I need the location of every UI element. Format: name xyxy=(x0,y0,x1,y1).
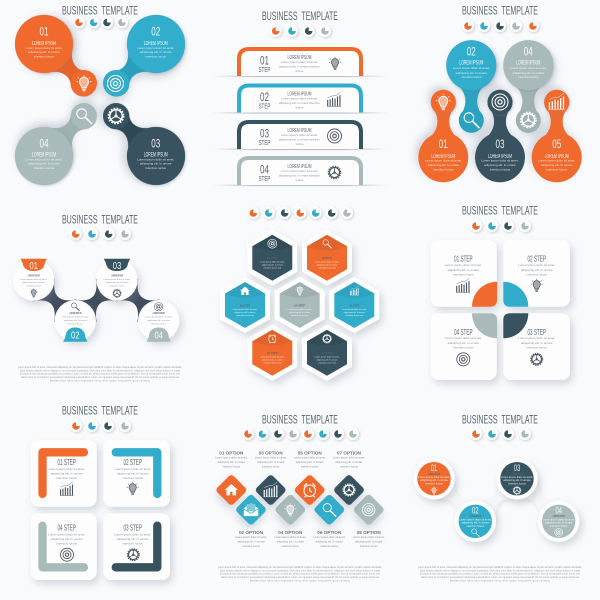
disc 03: 03 xyxy=(514,463,520,473)
hexagon orange search xyxy=(303,231,351,285)
hexagon orange clock: adipiscing elit. In ornare xyxy=(262,359,284,362)
legend dots xyxy=(470,428,531,440)
hexagon orange search: interdum luctus sed xyxy=(318,267,336,270)
footer paragraph: Quis ullamco laboris nisi ut aliquip ex ea commodo consequat. Duis aute irure dolor in reprehenderit in voluptate velit esse cillum dolore eu fugiat xyxy=(20,369,180,372)
droplet 01 orange: Lorem ipsum dolor sit amet, xyxy=(425,158,462,162)
hexagon blue home: adipiscing elit. In ornare xyxy=(234,311,256,314)
step 04 gray: Lorem ipsum dolor sit amet, xyxy=(25,158,63,162)
dark chain connectors xyxy=(32,278,160,322)
droplet 04 gray: interdum luctus xyxy=(518,75,539,79)
footer paragraph: Natus error sit voluptatem accusantium doloremque laudantium, totam rem aperiam eaque ipsa quae ab illo inventore veritatis et quasi architecto xyxy=(221,576,380,579)
diamond 01 orange home xyxy=(215,474,248,506)
step 01 tab: LOREM IPSUM xyxy=(288,55,312,61)
step 04 tab: LOREM IPSUM xyxy=(288,164,312,170)
card 02: Lorem ipsum dolor sit amet, xyxy=(518,263,555,267)
card 02: adipiscing elit. In ornare xyxy=(521,268,553,272)
footer paragraph: Quis ullamco laboris nisi ut aliquip ex ea commodo consequat. Duis aute irure dolor in reprehenderit in voluptate velit esse cillum dolore eu fugiat xyxy=(420,569,580,572)
card 04 xyxy=(31,513,97,580)
disc 02: adipiscing elit. In ornare xyxy=(462,521,490,525)
card 01: Lorem ipsum dolor sit amet, xyxy=(445,263,482,267)
card 03: 03 STEP xyxy=(527,328,546,337)
option 04: interdum luctus xyxy=(282,544,300,548)
step 01 tab xyxy=(212,49,388,77)
hexagon orange search: adipiscing elit. In ornare xyxy=(316,264,338,267)
circle 03 xyxy=(96,259,138,301)
card 02: 02 STEP xyxy=(527,255,546,264)
disc 04: interdum luctus xyxy=(550,524,568,528)
card 03: interdum luctus xyxy=(527,346,547,350)
hexagon dark target: 01 STEP xyxy=(267,256,278,260)
legend dots xyxy=(70,420,131,432)
card 04: Lorem ipsum dolor sit amet, xyxy=(48,533,85,537)
panel: coloured discs in white rings xyxy=(413,414,583,582)
option 03: Lorem ipsum dolor sit amet, xyxy=(255,456,287,460)
disc 02 xyxy=(455,501,496,542)
card 04: interdum luctus xyxy=(57,542,77,546)
step 02 tab: STEP xyxy=(258,104,271,110)
footer paragraph: Natus error sit voluptatem accusantium doloremque laudantium, totam rem aperiam eaque ipsa quae ab illo inventore veritatis et quasi architecto xyxy=(21,376,180,379)
card 02: adipiscing elit. In ornare xyxy=(117,472,149,476)
legend dots xyxy=(462,20,539,32)
step 01 tab: adipiscing elit. In ornare interdum xyxy=(279,64,320,68)
card 02: Lorem ipsum dolor sit amet, xyxy=(114,467,151,471)
droplet 02 blue xyxy=(446,40,496,133)
droplet 02 blue: Lorem ipsum dolor sit amet, xyxy=(453,66,490,70)
droplet 05 orange: 05 xyxy=(552,137,561,151)
option 07: adipiscing elit. In ornare xyxy=(335,460,363,464)
hexagon dark gear: adipiscing elit. In ornare xyxy=(316,359,338,362)
step 01 tab: 01 xyxy=(260,54,269,68)
footer paragraph: Lorem ipsum dolor sit amet, consectetur adipiscing elit. Sed eiusmod tempor incididunt ut labore et dolore magna aliqua. Ut enim ad minim veniam nostrud exercitation xyxy=(18,366,183,369)
step 03 tab: adipiscing elit. In ornare interdum xyxy=(279,138,320,142)
option 06 xyxy=(313,530,346,548)
diamond 06 blue search xyxy=(313,493,346,526)
droplet 01 orange: adipiscing elit. In ornare xyxy=(427,163,459,167)
circle 04: interdum luctus xyxy=(151,322,167,326)
card 03 xyxy=(503,313,570,380)
droplet 05 orange: interdum luctus xyxy=(547,168,567,172)
option 02: interdum luctus xyxy=(242,544,260,548)
card 04: adipiscing elit. In ornare xyxy=(447,341,479,345)
card 04: Lorem ipsum dolor sit amet, xyxy=(445,336,482,340)
option 01: 01 OPTION xyxy=(219,451,244,456)
circle 02: Lorem ipsum dolor sit amet, xyxy=(62,315,89,318)
step 01 orange: adipiscing elit. In ornare xyxy=(28,50,60,54)
circle 01: LOREM IPSUM xyxy=(28,274,40,278)
droplet 03 dark: adipiscing elit. In ornare xyxy=(484,163,516,167)
disc 01: Lorem ipsum dolor sit amet, xyxy=(418,475,450,479)
hexagon blue home xyxy=(221,278,269,332)
hexagon dark target xyxy=(248,231,296,285)
disc 01 xyxy=(413,458,455,499)
circle 03: 03 xyxy=(113,261,122,272)
hexagon orange clock: interdum luctus sed xyxy=(264,362,281,365)
droplet 03 dark xyxy=(475,90,525,182)
hexagon orange clock: Lorem ipsum dolor sit amet, xyxy=(260,356,285,359)
droplet 04 gray: Lorem ipsum dolor sit amet, xyxy=(510,66,547,70)
disc 04: Lorem ipsum dolor sit amet, xyxy=(543,518,575,522)
hexagon gray bulb: Lorem ipsum dolor sit amet, xyxy=(287,308,312,311)
disc 01: LOREM IPSUM xyxy=(428,472,440,476)
disc 01: adipiscing elit. In ornare xyxy=(420,478,448,482)
option 07 xyxy=(333,451,365,468)
hexagon dark gear: 07 STEP xyxy=(322,351,332,355)
step 03 tab: LOREM IPSUM xyxy=(288,128,312,134)
hexagon dark target: interdum luctus sed xyxy=(264,267,281,270)
droplet 04 gray: 04 xyxy=(524,45,533,59)
circle 01: interdum luctus xyxy=(26,284,42,287)
circle 03: Lorem ipsum dolor sit amet, xyxy=(104,278,131,281)
droplet 03 dark: LOREM IPSUM xyxy=(488,154,512,160)
diamond 05 orange clock xyxy=(293,474,326,506)
title: BUSINESS TEMPLATE xyxy=(462,6,538,18)
card 03: adipiscing elit. In ornare xyxy=(521,341,553,345)
legend dots xyxy=(70,228,131,240)
card 02: interdum luctus xyxy=(123,476,143,480)
hexagon blue bars: interdum luctus sed xyxy=(346,314,363,317)
step 01 orange: interdum luctus xyxy=(34,54,55,58)
droplet 01 orange xyxy=(418,90,468,182)
step 02 blue: interdum luctus xyxy=(146,54,166,58)
card 02 xyxy=(103,440,170,507)
step 04 tab: Lorem ipsum dolor sit amet, xyxy=(281,169,318,173)
disc 03 xyxy=(496,458,538,499)
option 05: interdum luctus xyxy=(301,464,319,468)
diamond 07 dark gear xyxy=(333,474,365,506)
hexagon dark gear: interdum luctus sed xyxy=(318,362,336,365)
step 04 gray: interdum luctus xyxy=(34,166,55,170)
option 06: adipiscing elit. In ornare xyxy=(316,539,344,543)
step 02 blue: 02 xyxy=(151,25,160,39)
card 02: interdum luctus xyxy=(527,272,547,276)
step 02 tab: 02 xyxy=(260,90,269,104)
option 06: interdum luctus xyxy=(321,544,339,548)
legend dots xyxy=(242,428,359,440)
title: BUSINESS TEMPLATE xyxy=(462,206,538,218)
diamond 04 gray bulb xyxy=(274,493,307,526)
panel: white circles on dark chain xyxy=(13,214,183,382)
option 05: 05 OPTION xyxy=(298,451,322,456)
legend dots xyxy=(247,207,353,219)
hexagon blue bars: Lorem ipsum dolor sit amet, xyxy=(342,308,367,311)
circle 01 xyxy=(13,259,54,301)
droplet 02 blue: adipiscing elit. In ornare xyxy=(455,71,487,75)
step 02 tab: LOREM IPSUM xyxy=(288,92,312,98)
legend dots xyxy=(73,16,128,28)
droplet 01 orange: 01 xyxy=(439,137,448,151)
circle 01: adipiscing elit. In ornare xyxy=(22,281,46,284)
card 01: adipiscing elit. In ornare xyxy=(51,472,83,476)
hexagon orange clock xyxy=(248,326,296,380)
droplet 04 gray: LOREM IPSUM xyxy=(516,60,540,66)
hexagon blue home: interdum luctus sed xyxy=(236,314,254,317)
card 01: 01 STEP xyxy=(57,458,76,467)
hexagon gray bulb: 04 STEP xyxy=(295,304,305,308)
disc 04: adipiscing elit. In ornare xyxy=(545,521,573,525)
step 04 gray: 04 xyxy=(40,137,49,151)
hexagon dark gear xyxy=(303,326,351,380)
step 02 tab: luctus xyxy=(296,106,304,110)
hexagon blue bars xyxy=(330,278,378,332)
card 04: adipiscing elit. In ornare xyxy=(51,537,83,541)
card 04: 04 STEP xyxy=(57,524,76,533)
panel: five vertical droplets xyxy=(418,6,582,182)
step 04 tab: 04 xyxy=(260,162,269,176)
option 02 xyxy=(235,530,267,548)
step 01 orange: LOREM IPSUM xyxy=(32,41,56,47)
step 01 tab: STEP xyxy=(258,67,271,74)
footer paragraph: Lorem ipsum dolor sit amet, consectetur adipiscing elit. Sed eiusmod tempor incididunt ut labore et dolore magna aliqua. Ut enim ad minim veniam nostrud exercitation xyxy=(218,566,383,569)
footer paragraph: Quis ullamco laboris nisi ut aliquip ex ea commodo consequat. Duis aute irure dolor in reprehenderit in voluptate velit esse cillum dolore eu fugiat xyxy=(220,569,380,572)
step 03 dark: LOREM IPSUM xyxy=(144,153,168,159)
option 08 xyxy=(353,530,385,548)
step 03 tab: STEP xyxy=(258,140,271,147)
option 04 xyxy=(274,530,307,548)
card 01: Lorem ipsum dolor sit amet, xyxy=(48,467,85,471)
footer paragraph: Lorem ipsum dolor sit amet, consectetur adipiscing elit. Sed eiusmod tempor incididunt ut labore et dolore magna aliqua. Ut enim ad minim veniam nostrud exercitation xyxy=(418,566,583,569)
option 08: adipiscing elit. In ornare xyxy=(355,539,383,543)
option 01: Lorem ipsum dolor sit amet, xyxy=(215,456,248,460)
panel: four cards with quarter discs xyxy=(431,206,570,380)
circle 04 xyxy=(138,300,179,342)
circle 04: Lorem ipsum dolor sit amet, xyxy=(145,315,173,318)
title: BUSINESS TEMPLATE xyxy=(62,6,138,18)
card 02: 02 STEP xyxy=(123,458,142,467)
circle 04: LOREM IPSUM xyxy=(153,311,165,315)
hexagon blue home: 03 STEP xyxy=(240,304,250,308)
option 04: 04 OPTION xyxy=(278,530,303,535)
circle 02: 02 xyxy=(71,331,80,342)
disc 04: 04 xyxy=(555,506,562,516)
disc 04 xyxy=(538,501,579,542)
footer paragraph: Excepteur sint occaecat cupidatat non proident, sunt in culpa qui officia deserunt mollit anim id est laborum. Sed ut perspiciatis unde omnis iste xyxy=(220,573,381,576)
option 07: Lorem ipsum dolor sit amet, xyxy=(333,456,365,460)
option 08: Lorem ipsum dolor sit amet, xyxy=(353,535,385,539)
step 03 tab: luctus xyxy=(296,142,304,146)
card 01: adipiscing elit. In ornare xyxy=(447,268,479,272)
step 03 tab xyxy=(212,122,388,150)
step 01 orange xyxy=(3,3,113,113)
card 01 xyxy=(431,240,497,307)
droplet 01 orange: LOREM IPSUM xyxy=(431,154,455,160)
droplet 01 orange: interdum luctus xyxy=(433,168,454,172)
disc 02: Lorem ipsum dolor sit amet, xyxy=(459,518,492,522)
footer paragraph: Excepteur sint occaecat cupidatat non proident, sunt in culpa qui officia deserunt mollit anim id est laborum. Sed ut perspiciatis unde omnis iste xyxy=(420,573,581,576)
card 02 xyxy=(503,240,570,307)
circle 02: LOREM IPSUM xyxy=(69,311,81,315)
card 04 xyxy=(431,313,497,380)
circle 02: adipiscing elit. In ornare xyxy=(64,319,88,322)
step 02 tab: Lorem ipsum dolor sit amet, xyxy=(281,96,318,100)
diamond 08 gray target xyxy=(352,493,385,526)
step 04 gray xyxy=(3,87,113,197)
step 01 tab: Lorem ipsum dolor sit amet, xyxy=(281,60,318,64)
legend dots xyxy=(270,25,331,37)
droplet 02 blue: 02 xyxy=(467,45,476,59)
option 07: interdum luctus xyxy=(340,464,358,468)
circle 03: LOREM IPSUM xyxy=(111,274,123,278)
title: BUSINESS TEMPLATE xyxy=(262,414,338,426)
circle 03: adipiscing elit. In ornare xyxy=(105,281,129,284)
footer paragraph: Excepteur sint occaecat cupidatat non proident, sunt in culpa qui officia deserunt mollit anim id est laborum. Sed ut perspiciatis unde omnis iste xyxy=(20,373,181,376)
droplet 05 orange: Lorem ipsum dolor sit amet, xyxy=(538,158,575,162)
option 04: Lorem ipsum dolor sit amet, xyxy=(274,535,307,539)
hexagon gray bulb: interdum luctus sed xyxy=(291,314,308,317)
circle 02 xyxy=(55,300,96,342)
step 04 tab: STEP xyxy=(258,176,271,183)
option 03: 03 OPTION xyxy=(259,451,283,456)
step 01 orange: Lorem ipsum dolor sit amet, xyxy=(25,46,63,50)
panel: eight option diamonds xyxy=(215,414,385,582)
option 03 xyxy=(255,451,287,468)
circle 01: 01 xyxy=(29,261,38,272)
step 03 dark: adipiscing elit. In ornare xyxy=(140,162,172,166)
droplet 02 blue: LOREM IPSUM xyxy=(459,60,483,66)
droplet 04 gray: adipiscing elit. In ornare xyxy=(512,71,544,75)
title: BUSINESS TEMPLATE xyxy=(262,11,338,23)
option 06: 06 OPTION xyxy=(317,530,342,535)
footer paragraph: Beatae vitae dicta sunt explicabo nemo enim ipsam voluptatem quia voluptas xyxy=(450,580,551,582)
legend dots xyxy=(470,220,531,232)
title: BUSINESS TEMPLATE xyxy=(62,214,138,226)
hexagon gray bulb xyxy=(276,278,324,332)
card 03 xyxy=(103,513,170,580)
circle 01: Lorem ipsum dolor sit amet, xyxy=(20,278,48,281)
step 04 tab xyxy=(212,158,388,186)
disc 03: LOREM IPSUM xyxy=(511,472,523,476)
circle 04: adipiscing elit. In ornare xyxy=(147,319,171,322)
panel: stacked step tabs xyxy=(212,11,388,186)
card 04: interdum luctus xyxy=(453,346,474,350)
droplet 03 dark: interdum luctus xyxy=(490,168,511,172)
disc 02: interdum luctus xyxy=(467,524,485,528)
disc 04: LOREM IPSUM xyxy=(553,514,565,518)
step 02 tab xyxy=(212,86,388,114)
step 02 blue: LOREM IPSUM xyxy=(144,41,168,47)
card 04: 04 STEP xyxy=(454,328,473,337)
step 04 tab: luctus xyxy=(296,178,304,182)
hexagon orange clock: 06 STEP xyxy=(267,351,278,355)
option 08: interdum luctus xyxy=(360,544,378,548)
option 03: interdum luctus xyxy=(262,464,280,468)
step 02 blue xyxy=(87,3,197,113)
option 01: adipiscing elit. In ornare xyxy=(218,460,246,464)
droplet 05 orange: adipiscing elit. In ornare xyxy=(541,163,573,167)
droplet 05 orange: LOREM IPSUM xyxy=(545,154,569,160)
circle 04: 04 xyxy=(154,331,163,342)
card 03: 03 STEP xyxy=(123,524,142,533)
option 05: adipiscing elit. In ornare xyxy=(296,460,324,464)
droplet 03 dark: Lorem ipsum dolor sit amet, xyxy=(481,158,519,162)
hexagon blue bars: adipiscing elit. In ornare xyxy=(344,311,366,314)
footer paragraph xyxy=(418,566,583,582)
option 02: adipiscing elit. In ornare xyxy=(237,539,265,543)
footer paragraph: Natus error sit voluptatem accusantium doloremque laudantium, totam rem aperiam eaque ipsa quae ab illo inventore veritatis et quasi architecto xyxy=(421,576,580,579)
option 02: Lorem ipsum dolor sit amet, xyxy=(235,535,267,539)
option 08: 08 OPTION xyxy=(357,530,381,535)
disc 01: interdum luctus xyxy=(425,482,443,486)
option 05: Lorem ipsum dolor sit amet, xyxy=(294,456,326,460)
card 01: 01 STEP xyxy=(454,255,473,264)
hexagon dark target: Lorem ipsum dolor sit amet, xyxy=(260,261,285,264)
panel: four-petal metaball diagram xyxy=(3,3,197,197)
circle 03: interdum luctus xyxy=(110,284,125,287)
step 03 dark: 03 xyxy=(151,137,160,151)
footer paragraph xyxy=(218,566,383,582)
step 02 tab: adipiscing elit. In ornare interdum xyxy=(279,101,320,105)
hexagon gray bulb: adipiscing elit. In ornare xyxy=(289,311,311,314)
card 03: Lorem ipsum dolor sit amet, xyxy=(114,533,151,537)
hexagon blue bars: 05 STEP xyxy=(349,304,360,308)
step 04 tab: adipiscing elit. In ornare interdum xyxy=(279,174,320,178)
disc 01: 01 xyxy=(431,463,437,473)
option 06: Lorem ipsum dolor sit amet, xyxy=(313,535,346,539)
disc 03: Lorem ipsum dolor sit amet, xyxy=(501,475,533,479)
circle 02: interdum luctus xyxy=(68,322,84,326)
diamond 03 dark bars xyxy=(254,474,287,506)
option 01 xyxy=(215,451,248,468)
pale connectors xyxy=(433,477,560,521)
card 01: interdum luctus xyxy=(57,476,77,480)
hexagon dark gear: Lorem ipsum dolor sit amet, xyxy=(315,356,340,359)
droplet 03 dark: 03 xyxy=(496,137,505,151)
hexagon orange search: Lorem ipsum dolor sit amet, xyxy=(315,261,340,264)
disc 02: LOREM IPSUM xyxy=(469,514,481,518)
option 03: adipiscing elit. In ornare xyxy=(257,460,285,464)
disc 03: adipiscing elit. In ornare xyxy=(503,478,531,482)
droplet 04 gray xyxy=(503,40,553,133)
step 03 tab: 03 xyxy=(260,126,269,140)
footer paragraph: Beatae vitae dicta sunt explicabo nemo enim ipsam voluptatem quia voluptas xyxy=(50,380,151,382)
diamond 02 blue mail xyxy=(235,493,267,526)
card 03: Lorem ipsum dolor sit amet, xyxy=(518,336,555,340)
option 04: adipiscing elit. In ornare xyxy=(277,539,305,543)
step 02 blue: adipiscing elit. In ornare xyxy=(140,50,172,54)
step 01 orange: 01 xyxy=(40,25,49,39)
footer paragraph xyxy=(18,366,183,382)
droplet 05 orange xyxy=(532,90,582,182)
droplet 02 blue: interdum luctus xyxy=(461,75,482,79)
option 07: 07 OPTION xyxy=(337,451,362,456)
hexagon orange search: 02 STEP xyxy=(322,256,332,260)
hexagon blue home: Lorem ipsum dolor sit amet, xyxy=(233,308,258,311)
disc 03: interdum luctus xyxy=(508,482,526,486)
step 03 dark: interdum luctus xyxy=(146,166,166,170)
step 03 dark: Lorem ipsum dolor sit amet, xyxy=(137,158,174,162)
step 04 gray: adipiscing elit. In ornare xyxy=(28,162,60,166)
card 01: interdum luctus xyxy=(453,272,474,276)
step 03 tab: Lorem ipsum dolor sit amet, xyxy=(281,133,318,137)
panel: four cards with corner brackets xyxy=(31,406,170,580)
title: BUSINESS TEMPLATE xyxy=(62,406,138,418)
footer paragraph: Beatae vitae dicta sunt explicabo nemo enim ipsam voluptatem quia voluptas xyxy=(250,580,351,582)
panel: seven hexagons xyxy=(221,207,378,380)
hexagon dark target: adipiscing elit. In ornare xyxy=(262,264,284,267)
step 04 gray: LOREM IPSUM xyxy=(32,153,56,159)
title: BUSINESS TEMPLATE xyxy=(462,414,538,426)
card 03: interdum luctus xyxy=(123,542,143,546)
step 03 dark xyxy=(87,87,197,197)
card 01 xyxy=(31,440,97,507)
step 02 blue: Lorem ipsum dolor sit amet, xyxy=(137,46,174,50)
option 01: interdum luctus xyxy=(223,464,241,468)
option 05 xyxy=(294,451,326,468)
option 02: 02 OPTION xyxy=(239,530,264,535)
card 03: adipiscing elit. In ornare xyxy=(117,537,149,541)
disc 02: 02 xyxy=(472,506,479,516)
step 01 tab: luctus xyxy=(296,69,304,73)
